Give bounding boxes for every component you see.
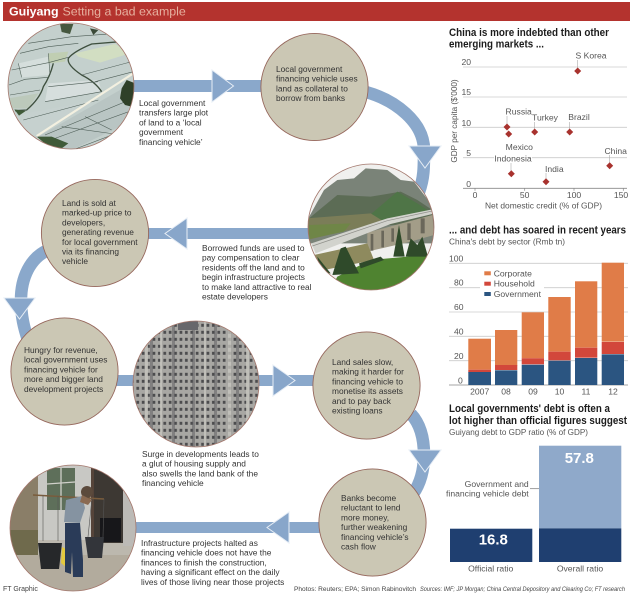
scatter chart: Net domestic credit (% of GDP) <box>485 202 602 210</box>
legend: Corporate <box>494 268 532 278</box>
step 7 circle <box>313 332 420 439</box>
step 7 circle: Land sales slow, <box>332 357 393 367</box>
photo: apartment tower <box>133 321 259 447</box>
stacked bar chart: 20 <box>454 351 464 361</box>
arrow: step 8 to 9 <box>132 512 322 543</box>
step 7 circle: making it harder for <box>332 367 404 377</box>
step 8 circle: more money, <box>341 512 389 522</box>
scatter chart: 0 <box>466 179 471 189</box>
stacked bar chart: 09 <box>528 386 538 396</box>
step 8 circle: reluctant to lend <box>341 503 401 513</box>
ratio bar chart: Government and <box>465 479 529 489</box>
stacked bar chart: 2007 <box>470 386 489 396</box>
stacked bar chart: 80 <box>454 278 464 288</box>
step 4 circle: developers, <box>62 217 105 227</box>
step 4 circle <box>41 179 149 287</box>
scatter chart: Turkey <box>532 112 559 122</box>
scatter chart: China <box>604 146 627 156</box>
ratio bar chart: Overall ratio <box>557 563 603 573</box>
credit: FT Graphic: FT Graphic <box>3 586 38 593</box>
arrow: step 1 to 2 <box>130 70 265 102</box>
step 8 circle <box>319 469 426 576</box>
credit: photos: Photos: Reuters; EPA; Simon Rabinovitch <box>294 586 416 593</box>
step 8 circle: Banks become <box>341 493 397 503</box>
stacked bar chart: 40 <box>454 326 464 336</box>
text: step 9: Infrastructure projects halted as <box>141 538 258 548</box>
step 7 circle: monetise its assets <box>332 386 403 396</box>
step 5 circle: Hungry for revenue, <box>24 345 98 355</box>
text: step 6: financing vehicle <box>142 478 204 488</box>
text: step 3: to make land attractive to real <box>202 282 312 292</box>
step 5 circle: financing vehicle for <box>24 364 98 374</box>
scatter title: emerging markets ... <box>449 38 544 50</box>
text: step 3: residents off the land and to <box>202 262 305 272</box>
step 4 circle: via its financing <box>62 246 119 256</box>
ratio bar chart: financing vehicle debt <box>446 489 529 499</box>
scatter chart: Russia <box>506 106 532 116</box>
scatter title: China is more indebted than other <box>449 27 610 39</box>
legend: Government <box>494 289 542 299</box>
ratio bar chart: 57.8 <box>565 450 594 467</box>
step 8 circle: financing vehicle’s <box>341 532 409 542</box>
stacked bar chart: 11 <box>582 386 591 396</box>
step 7 circle: financing vehicle to <box>332 376 403 386</box>
photo 9 outline <box>10 465 136 591</box>
stacked bar chart: 60 <box>454 302 464 312</box>
step 5 circle: more and bigger land <box>24 374 103 384</box>
step 8 circle: further weakening <box>341 522 408 532</box>
text: step 1: of land to a ‘local <box>139 117 202 127</box>
step 2 circle: financing vehicle uses <box>276 74 358 84</box>
scatter chart: India <box>545 164 564 174</box>
scatter chart: S Korea <box>575 50 607 60</box>
text: step 3: begin infrastructure projects <box>202 272 305 282</box>
step 5 circle: local government uses <box>24 355 107 365</box>
photo 3 outline <box>308 164 434 290</box>
scatter chart: 10 <box>461 118 471 128</box>
scatter chart: Brazil <box>568 112 590 122</box>
header bar: Setting a bad example <box>62 4 186 18</box>
photo: highway viaduct <box>308 164 434 290</box>
photo 1 outline <box>8 23 134 149</box>
step 7 circle: and to pay back <box>332 396 392 406</box>
text: step 1: transfers large plot <box>139 108 209 118</box>
stacked bar chart: 100 <box>449 254 464 264</box>
scatter chart: 5 <box>466 148 471 158</box>
scatter chart: 15 <box>461 87 471 97</box>
step 7 circle: existing loans <box>332 406 383 416</box>
step 2 circle <box>261 33 368 141</box>
arrow: step 5 to 7 <box>115 365 320 396</box>
scatter chart: 0 <box>473 190 478 200</box>
scatter chart: Mexico <box>506 142 533 152</box>
text: step 3: estate developers <box>202 292 268 302</box>
legend <box>480 268 544 299</box>
text: step 1: government <box>139 127 184 137</box>
ratio chart title: Local governments' debt is often a <box>449 403 611 415</box>
scatter chart: 150 <box>614 190 628 200</box>
photo: rice terraces <box>8 23 134 149</box>
text: step 1: financing vehicle’ <box>139 137 203 147</box>
text: step 9: finances to finish the construction, <box>141 557 267 567</box>
step 4 circle: vehicle <box>62 256 88 266</box>
text: step 9: lives of those living near those projects <box>141 577 284 587</box>
arrow: step 2 to 3 <box>366 92 441 192</box>
scatter chart: 50 <box>520 190 530 200</box>
stacked bar chart: 12 <box>608 386 618 396</box>
stacked bar chart: 0 <box>458 376 463 386</box>
step 4 circle: marked-up price to <box>62 208 132 218</box>
scatter chart: Indonesia <box>494 154 532 164</box>
text: step 9: having a significant effect on the daily <box>141 567 280 577</box>
text: step 3: Borrowed funds are used to <box>202 243 305 253</box>
photo: man carrying buckets <box>10 465 137 595</box>
step 4 circle: generating revenue <box>62 227 134 237</box>
arrow: step 7 to 8 <box>409 414 441 494</box>
text: step 6: also swells the land bank of the <box>142 468 258 478</box>
arrow: step 4 to 5 <box>4 250 48 340</box>
photo 6 outline <box>133 321 259 447</box>
text: step 3: pay compensation to clear <box>202 253 300 263</box>
step 2 circle: Local government <box>276 64 343 74</box>
stacked bar chart: 10 <box>555 386 564 396</box>
stacked bar chart: 08 <box>501 386 511 396</box>
ratio chart subtitle: Guiyang debt to GDP ratio (% of GDP) <box>449 427 588 437</box>
step 8 circle: cash flow <box>341 542 377 552</box>
step 4 circle: for local government <box>62 237 138 247</box>
step 2 circle: borrow from banks <box>276 93 345 103</box>
scatter chart: 100 <box>567 190 581 200</box>
text: step 1: Local government <box>139 98 206 108</box>
header bar <box>3 2 630 21</box>
scatter chart: 20 <box>461 57 471 67</box>
ratio bar chart <box>446 446 621 573</box>
legend: Household <box>494 279 535 289</box>
header bar: Guiyang <box>9 4 59 18</box>
ratio bar chart: Official ratio <box>468 563 514 573</box>
text: step 9: financing vehicle does not have the <box>141 548 272 558</box>
text: step 6: a glut of housing supply and <box>142 459 246 469</box>
bars: 2007 to 2012 <box>468 263 624 385</box>
ratio bar chart: 16.8 <box>479 532 508 548</box>
text: step 6: Surge in developments leads to <box>142 449 259 459</box>
scatter chart <box>450 50 628 210</box>
stacked bar subtitle: China's debt by sector (Rmb tn) <box>449 236 565 246</box>
scatter chart: GDP per capita ($'000) <box>450 79 459 163</box>
step 5 circle <box>11 318 118 425</box>
stacked bar chart <box>449 254 628 396</box>
arrow: step 3 to 4 <box>145 218 315 249</box>
step 4 circle: Land is sold at <box>62 198 116 208</box>
step 5 circle: development projects <box>24 384 103 394</box>
step 2 circle: land as collateral to <box>276 83 348 93</box>
